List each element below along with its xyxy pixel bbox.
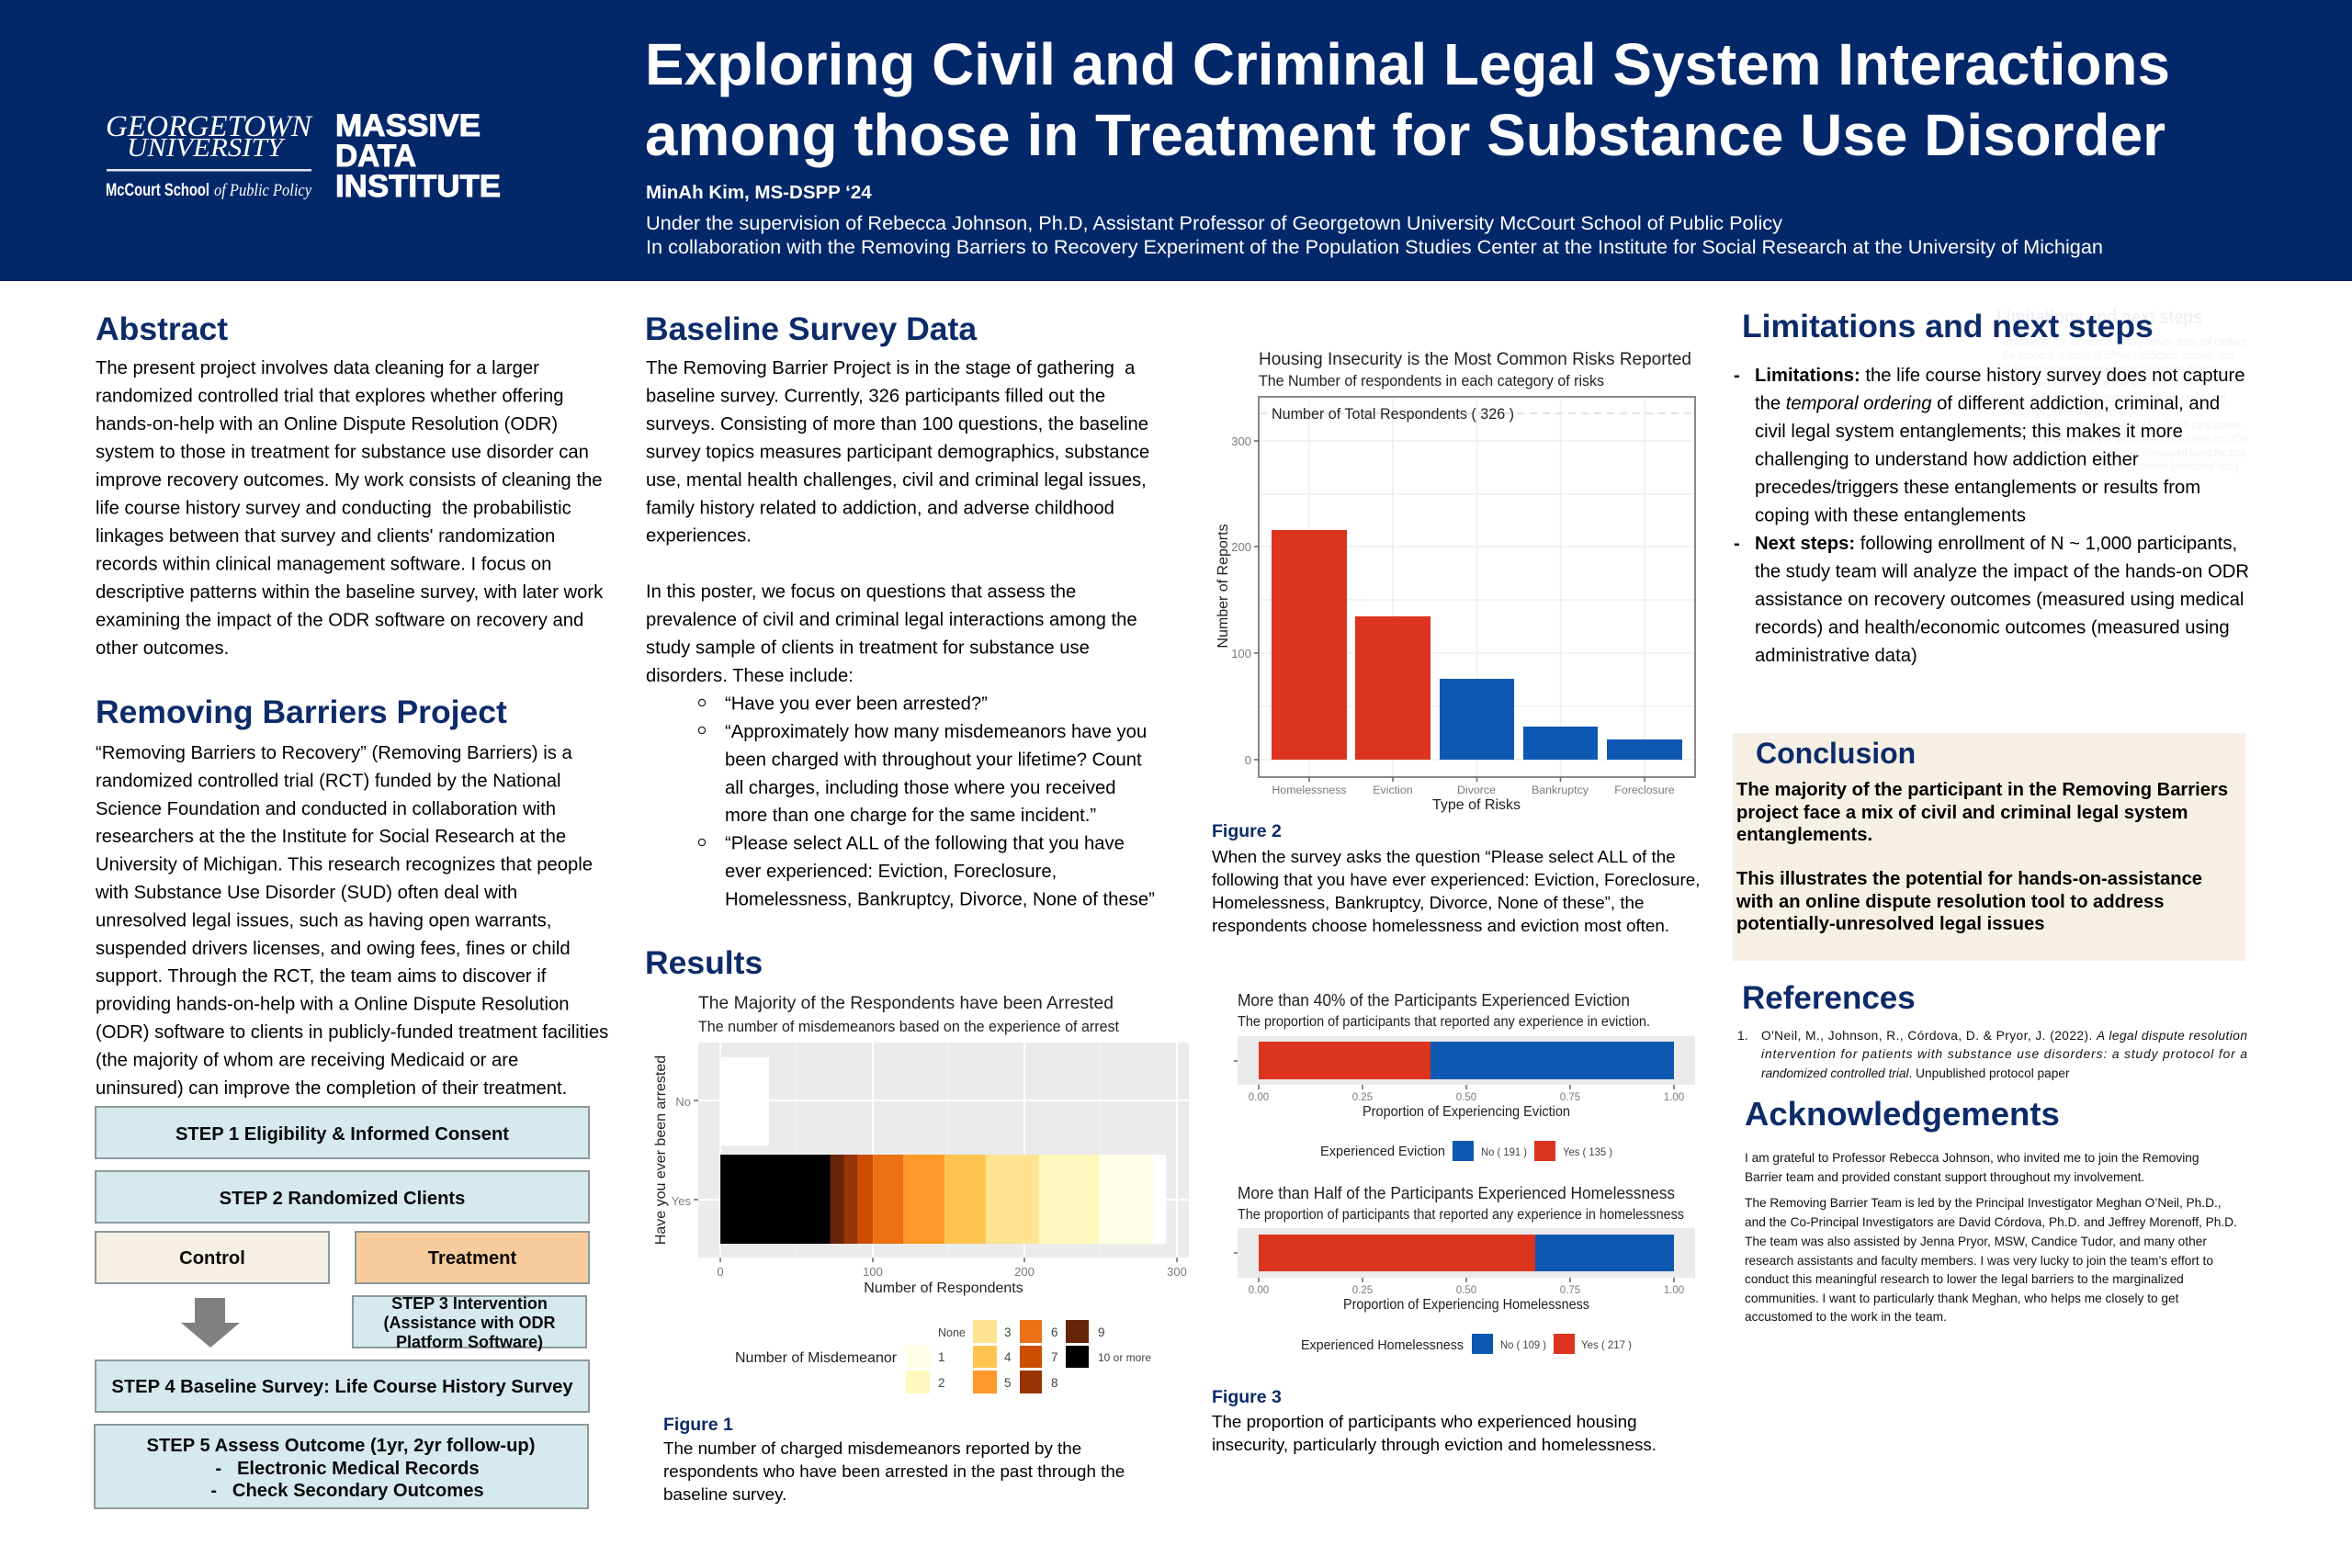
legend: number of misdemeanors: 9 [1098,1325,1105,1339]
text: acknowledgements body: accustomed to the work in the team. [1745,1310,1947,1324]
text: limitations and next steps list: - [1734,534,1740,554]
author and affiliations [646,182,2103,258]
legend: number of misdemeanors: Number of Misdemeanor [735,1350,898,1366]
chart: figure 3 homelessness proportion: 0.00 [1249,1285,1269,1296]
text: abstract body: hands-on-help with an Online Dispute Resolution (ODR) [96,414,558,434]
chart: figure 2 risks bar chart: Divorce [1457,784,1496,796]
text: baseline survey body: survey topics measures participant demographics, substance [646,442,1149,462]
text: abstract body: randomized controlled trial that explores whether offering [96,386,564,406]
text: limitations and next steps list: challenging to understand how addiction either [1755,450,2139,470]
legend: number of misdemeanors: 1 [938,1350,945,1364]
heading: Abstract: Abstract [96,310,228,347]
panel: conclusion [1733,733,2245,961]
caption: figure 2: respondents choose homelessness and eviction most often. [1212,916,1669,935]
text: reference list: 1. [1737,1029,1747,1043]
text: removing barriers body: providing hands-on-help with a Online Dispute Resolution [96,995,570,1015]
step 2 box: STEP 2 Randomized Clients [220,1189,465,1209]
text: limitations and next steps list: Next steps: following enrollment of N ~ 1,000 participants, [1755,534,2237,554]
chart: figure 3 homelessness proportion: 0.25 [1352,1285,1373,1296]
text: limitations and next steps list: - [1734,366,1740,386]
chart: figure 1 misdemeanors stacked bar: Number of Respondents [864,1280,1023,1296]
text: limitations and next steps list: records) and health/economic outcomes (measured using [1755,617,2230,637]
legend: homelessness: Experienced Homelessness [1301,1337,1464,1353]
logo: Georgetown University McCourt School: of Public Policy [214,181,311,200]
text: conclusion statement: entanglements. [1736,825,1872,845]
text: limitations and next steps list: civil legal system entanglements; this makes it more [1755,422,2183,442]
chart: figure 3 eviction proportion: 1.00 [1664,1092,1684,1103]
text: removing barriers body: University of Michigan. This research recognizes that people [96,855,593,875]
chart: figure 3 homelessness proportion: 1.00 [1664,1285,1684,1296]
chart: figure 2 risks bar chart: 0 [1245,753,1251,767]
chart: figure 2 risks bar chart: 100 [1231,647,1251,660]
logo: Massive Data Institute: MASSIVE [335,108,481,143]
chart: figure 3 homelessness proportion: 0.50 [1456,1285,1476,1296]
heading: Removing Barriers Project: Removing Barriers Project [96,694,507,730]
chart: figure 3 eviction proportion: 0.00 [1249,1092,1269,1103]
text: acknowledgements body: The Removing Barrier Team is led by the Principal Investigator Meghan O’Neil, Ph.D., [1745,1196,2222,1210]
step 2 box [96,1171,589,1223]
chart: figure 2 risks bar chart: Housing Insecurity is the Most Common Risks Reported [1259,349,1691,369]
chart: figure 3 eviction proportion [1234,990,1695,1161]
text: acknowledgements body: and the Co-Principal Investigators are David Córdova, Ph.D. and Jeffrey Morenoff, Ph.D. [1745,1215,2237,1229]
chart: figure 3 homelessness proportion: More than Half of the Participants Experienced Homelessness [1238,1183,1675,1202]
heading: Limitations and next steps: Limitations and next steps [1742,308,2154,344]
legend: eviction [1320,1141,1612,1161]
ghost text: faint limitations duplicate: records) and health/economic outcomes (measured using [2003,460,2239,473]
text: limitations and next steps list: the study team will analyze the impact of the hands-on ODR [1755,562,2249,582]
chart: figure 2 risks bar chart: Bankruptcy [1532,784,1589,796]
text: abstract body: life course history survey and conducting the probabilistic [96,498,571,518]
ghost text: faint limitations duplicate: Next steps: following enrollment of N ~ 1,000 participants, [2003,419,2242,432]
text: baseline survey body: experiences. [646,526,752,547]
chart: figure 1 misdemeanors stacked bar: 200 [1014,1265,1035,1279]
text: abstract body: linkages between that survey and clients' randomization [96,526,555,547]
step 3 box: Platform Software) [396,1333,543,1351]
text: abstract body: other outcomes. [96,638,229,659]
text: baseline survey body: “Please select ALL of the following that you have [725,834,1125,854]
chart: figure 3 eviction proportion: 0.25 [1352,1092,1373,1103]
chart: figure 3 homelessness proportion: Proportion of Experiencing Homelessness [1343,1297,1589,1313]
step 1 box: STEP 1 Eligibility & Informed Consent [175,1124,509,1145]
text: reference list: O'Neil, M., Johnson, R., Córdova, D. & Pryor, J. (2022). A legal dispute resolution [1761,1029,2247,1043]
control box [96,1232,329,1283]
text: removing barriers body: support. Through the RCT, the team aims to discover if [96,966,547,987]
text: limitations and next steps list: precedes/triggers these entanglements or results from [1755,478,2200,498]
text: abstract body: records within clinical management software. I focus on [96,555,551,575]
text: removing barriers body: researchers at the the Institute for Social Research at the [96,827,566,847]
text: baseline survey body: all charges, including those where you received [725,778,1115,798]
ghost text: faint limitations duplicate: coping with these entanglements [2003,405,2136,418]
legend: number of misdemeanors: 5 [1004,1376,1012,1390]
step 1 box [96,1107,589,1158]
step 4 box [96,1360,589,1412]
text: conclusion statement: project face a mix of civil and criminal legal system [1736,803,2188,823]
text: acknowledgements body: research assistants and faculty members. I was very lucky to join the team’s effort to [1745,1254,2213,1268]
chart: figure 1 misdemeanors stacked bar: No [675,1095,691,1109]
text: baseline survey body: “Approximately how many misdemeanors have you [725,722,1147,742]
text: removing barriers body: with Substance Use Disorder (SUD) often deal with [95,883,517,903]
text: removing barriers body: uninsured) can improve the completion of their treatment. [96,1078,567,1099]
text: limitations and next steps list [1734,366,2255,666]
caption: figure 2: following that you have ever experienced: Eviction, Foreclosure, [1212,870,1700,889]
text: abstract body: The present project involves data cleaning for a larger [96,358,539,378]
text: acknowledgements body: communities. I want to particularly thank Meghan, who helps me closely to get [1745,1292,2179,1305]
text: reference list [1737,1029,2247,1080]
ghost text: faint limitations duplicate: Limitations and next steps [1996,307,2202,328]
ghost text: faint limitations duplicate [1996,307,2248,473]
heading: References: References [1742,980,1916,1016]
caption: figure 1: respondents who have been arrested in the past through the [663,1461,1125,1481]
legend: eviction: Yes ( 135 ) [1563,1145,1612,1158]
logo: Georgetown University McCourt School [106,110,313,200]
legend: homelessness: Yes ( 217 ) [1581,1338,1632,1351]
treatment box: Treatment [428,1248,517,1269]
step 5 box: - Check Secondary Outcomes [210,1481,484,1501]
text: conclusion statement: This illustrates the potential for hands-on-assistance [1736,869,2202,889]
ghost text: faint limitations duplicate: assistance on recovery outcomes (measured using medical [2003,446,2246,459]
legend: number of misdemeanors: None [938,1326,966,1339]
ghost text: faint limitations duplicate: precedes/triggers these entanglements or results from [2003,391,2226,404]
text: limitations and next steps list: assistance on recovery outcomes (measured using medical [1755,590,2244,610]
legend: number of misdemeanors: 6 [1051,1325,1058,1339]
text: acknowledgements body: The team was also assisted by Jenna Pryor, MSW, Candice Tudor, and many other [1745,1235,2207,1248]
text: abstract body: system to those in treatment for substance use disorder can [96,443,589,463]
text: removing barriers body: (the majority of whom are receiving Medicaid or are [96,1050,518,1070]
chart: figure 3 eviction proportion: Proportion of Experiencing Eviction [1363,1104,1570,1120]
flowchart: study design [95,1107,589,1508]
text: conclusion statement: with an online dispute resolution tool to address [1736,892,2164,912]
text: removing barriers body: (ODR) software to clients in publicly-funded treatment facilities [96,1022,608,1043]
control box: Control [179,1248,245,1269]
text: removing barriers body: “Removing Barriers to Recovery” (Removing Barriers) is a [96,743,572,763]
logo: Georgetown University McCourt School: UNIVERSITY [127,133,286,163]
chart: figure 1 misdemeanors stacked bar: The number of misdemeanors based on the experience of arrest [698,1019,1119,1035]
title: Exploring Civil and Criminal Legal System Interactions [645,31,2170,97]
text: baseline survey body: surveys. Consisting of more than 100 questions, the baseline [646,414,1148,434]
author and affiliations: MinAh Kim, MS-DSPP ‘24 [646,182,872,203]
text: reference list: randomized controlled trial. Unpublished protocol paper [1761,1066,2070,1080]
chart: figure 2 risks bar chart: 200 [1231,540,1251,554]
legend: number of misdemeanors: 7 [1051,1350,1058,1364]
chart: figure 1 misdemeanors stacked bar: The Majority of the Respondents have been Arrested [698,993,1114,1013]
ghost text: faint limitations duplicate: Limitations: the life course history survey does not capture [2003,335,2246,348]
ghost text: faint limitations duplicate: the study team will analyze the impact of the hands-on ODR [2003,433,2248,446]
text: limitations and next steps list: coping with these entanglements [1755,505,2026,525]
chart: figure 2 risks bar chart: Number of Reports [1216,524,1231,649]
text: baseline survey body: Homelessness, Bankruptcy, Divorce, None of these” [725,890,1155,910]
text: acknowledgements body: Barrier team and provided constant support throughout my involvement. [1745,1170,2144,1184]
chart: figure 2 risks bar chart: Type of Risks [1432,797,1521,813]
ghost text: faint limitations duplicate: the temporal ordering of different addiction, criminal, and [2003,349,2234,362]
author and affiliations: In collaboration with the Removing Barriers to Recovery Experiment of the Population Studies Center at the Institute for Social Research at the University of Michigan [646,236,2103,258]
chart: figure 1 misdemeanors stacked bar: 0 [717,1265,724,1279]
header banner [0,0,2352,281]
author and affiliations: Under the supervision of Rebecca Johnson, Ph.D, Assistant Professor of Georgetown University McCourt School of Public Policy [646,212,1782,234]
chart: figure 3 homelessness proportion [1234,1183,1695,1354]
step 4 box: STEP 4 Baseline Survey: Life Course History Survey [111,1377,573,1397]
legend: eviction: No ( 191 ) [1481,1145,1527,1158]
text: baseline survey body: In this poster, we focus on questions that assess the [646,582,1076,603]
caption: figure 2: Figure 2 [1212,821,1282,841]
chart: figure 1 misdemeanors stacked bar [653,993,1189,1393]
text: acknowledgements body: I am grateful to Professor Rebecca Johnson, who invited me to join the Removing [1745,1151,2199,1165]
legend: number of misdemeanors: 3 [1004,1325,1012,1339]
chart: figure 1 misdemeanors stacked bar: 300 [1167,1265,1187,1279]
chart: figure 3 eviction proportion: More than 40% of the Participants Experienced Eviction [1238,990,1630,1010]
text: reference list: intervention for patients with substance use disorders: a study protocol for a [1761,1047,2247,1061]
chart: figure 2 risks bar chart: Foreclosure [1614,784,1675,796]
ghost text: faint limitations duplicate: challenging to understand how addiction either [2003,377,2194,389]
caption: figure 3: The proportion of participants who experienced housing [1212,1412,1637,1431]
legend: number of misdemeanors: 2 [938,1376,945,1390]
step 5 box: STEP 5 Assess Outcome (1yr, 2yr follow-up) [147,1436,535,1456]
text: abstract body: improve recovery outcomes. My work consists of cleaning the [96,470,602,491]
chart: figure 3 eviction proportion: The proportion of participants that reported any experience in eviction. [1238,1014,1650,1030]
text: removing barriers body: suspended drivers licenses, and owing fees, fines or child [96,939,571,959]
step 3 box: (Assistance with ODR [383,1314,556,1332]
step 5 box [95,1425,588,1508]
legend: eviction: Experienced Eviction [1320,1144,1445,1159]
text: baseline survey body: family history related to addiction, and adverse childhood [646,498,1114,518]
heading: Baseline Survey Data: Baseline Survey Data [645,310,977,347]
text: removing barriers body: unresolved legal issues, such as having open warrants, [96,910,551,931]
text: removing barriers body: randomized controlled trial (RCT) funded by the National [96,771,560,791]
caption: figure 1: baseline survey. [663,1484,786,1504]
chart: figure 1 misdemeanors stacked bar: Yes [672,1194,691,1208]
logo: Massive Data Institute: DATA [335,139,416,174]
logo: Georgetown University McCourt School: GEORGETOWN [106,110,313,143]
step 5 box: - Electronic Medical Records [215,1459,480,1479]
chart: figure 3 homelessness proportion: 0.75 [1560,1285,1580,1296]
treatment box [356,1232,589,1283]
legend: number of misdemeanors: 8 [1051,1376,1058,1390]
text: limitations and next steps list: Limitations: the life course history survey does not capture [1755,366,2245,386]
chart: figure 2 risks bar chart: Homelessness [1272,784,1347,796]
text: baseline survey body: use, mental health challenges, civil and criminal legal issues, [646,470,1147,491]
bullets: survey questions [698,699,706,846]
heading: Acknowledgements: Acknowledgements [1745,1095,2060,1133]
step 3 box [353,1294,586,1351]
caption: figure 3: Figure 3 [1212,1387,1282,1407]
title: among those in Treatment for Substance Use Disorder [645,102,2165,168]
text: abstract body: descriptive patterns within the baseline survey, with later work [96,582,604,603]
heading: conclusion: Conclusion [1756,737,1916,770]
chart: figure 1 misdemeanors stacked bar: Have you ever been arrested [653,1055,669,1245]
chart: figure 3 eviction proportion: 0.75 [1560,1092,1580,1103]
caption: figure 3 [1212,1387,1657,1454]
logo: Massive Data Institute [335,108,501,204]
arrow: control to step 4 [181,1298,240,1348]
chart: figure 1 misdemeanors stacked bar: 100 [863,1265,883,1279]
legend: number of misdemeanors [735,1320,1151,1393]
text: conclusion statement [1736,780,2228,934]
legend: number of misdemeanors: 10 or more [1098,1351,1151,1364]
text: baseline survey body: “Have you ever been arrested?” [725,694,988,714]
caption: figure 2: Homelessness, Bankruptcy, Divorce, None of these”, the [1212,893,1644,912]
text: baseline survey body: been charged with throughout your lifetime? Count [725,750,1142,770]
title [645,31,2170,168]
text: baseline survey body: disorders. These include: [646,666,854,686]
caption: figure 1 [663,1415,1125,1504]
chart: figure 2 risks bar chart [1216,349,1695,813]
text: conclusion statement: The majority of the participant in the Removing Barriers [1736,780,2228,800]
text: conclusion statement: potentially-unresolved legal issues [1736,914,2044,934]
stacked bar: yes [720,1155,1166,1244]
logo: Massive Data Institute: INSTITUTE [335,169,501,204]
text: limitations and next steps list: administrative data) [1755,646,1917,666]
legend: homelessness: No ( 109 ) [1500,1338,1546,1351]
chart: figure 2 risks bar chart: 300 [1231,434,1251,448]
text: abstract body: examining the impact of the ODR software on recovery and [96,610,583,630]
text: baseline survey body: prevalence of civil and criminal legal interactions among the [646,610,1137,630]
chart: figure 3 eviction proportion: 0.50 [1456,1092,1476,1103]
logo: Georgetown University McCourt School: McCourt School [106,181,209,200]
caption: figure 1: The number of charged misdemeanors reported by the [663,1438,1081,1458]
chart: figure 2 risks bar chart: The Number of respondents in each category of risks [1259,373,1604,389]
text: baseline survey body: study sample of clients in treatment for substance use [646,637,1090,658]
ghost text: faint limitations duplicate: civil legal system entanglements; this makes it more [2003,363,2216,376]
chart: figure 2 risks bar chart: Eviction [1373,784,1413,796]
text: acknowledgements body: conduct this meaningful research to lower the legal barriers to the marginalized [1745,1272,2184,1286]
text: baseline survey body: baseline survey. Currently, 326 participants filled out the [646,386,1105,406]
legend: homelessness [1301,1334,1632,1354]
text: baseline survey body: more than one charge for the same incident.” [725,806,1096,826]
chart: figure 2 risks bar chart: Number of Total Respondents ( 326 ) [1272,405,1514,423]
heading: Results: Results [645,944,763,981]
caption: figure 1: Figure 1 [663,1415,733,1435]
text: baseline survey body: ever experienced: Eviction, Foreclosure, [725,862,1057,882]
chart: figure 3 homelessness proportion: The proportion of participants that reported any experience in homelessness [1238,1207,1684,1223]
text: baseline survey body: The Removing Barrier Project is in the stage of gathering a [646,358,1136,378]
caption: figure 2 [1212,821,1700,935]
text: removing barriers body: Science Foundation and conducted in collaboration with [96,799,556,819]
text: limitations and next steps list: the temporal ordering of different addiction, criminal, and [1755,393,2220,413]
caption: figure 2: When the survey asks the question “Please select ALL of the [1212,847,1676,866]
legend: number of misdemeanors: 4 [1004,1350,1012,1364]
text: acknowledgements body [1745,1151,2237,1324]
step 3 box: STEP 3 Intervention [391,1294,548,1313]
caption: figure 3: insecurity, particularly through eviction and homelessness. [1212,1435,1657,1454]
bars [1272,530,1682,760]
